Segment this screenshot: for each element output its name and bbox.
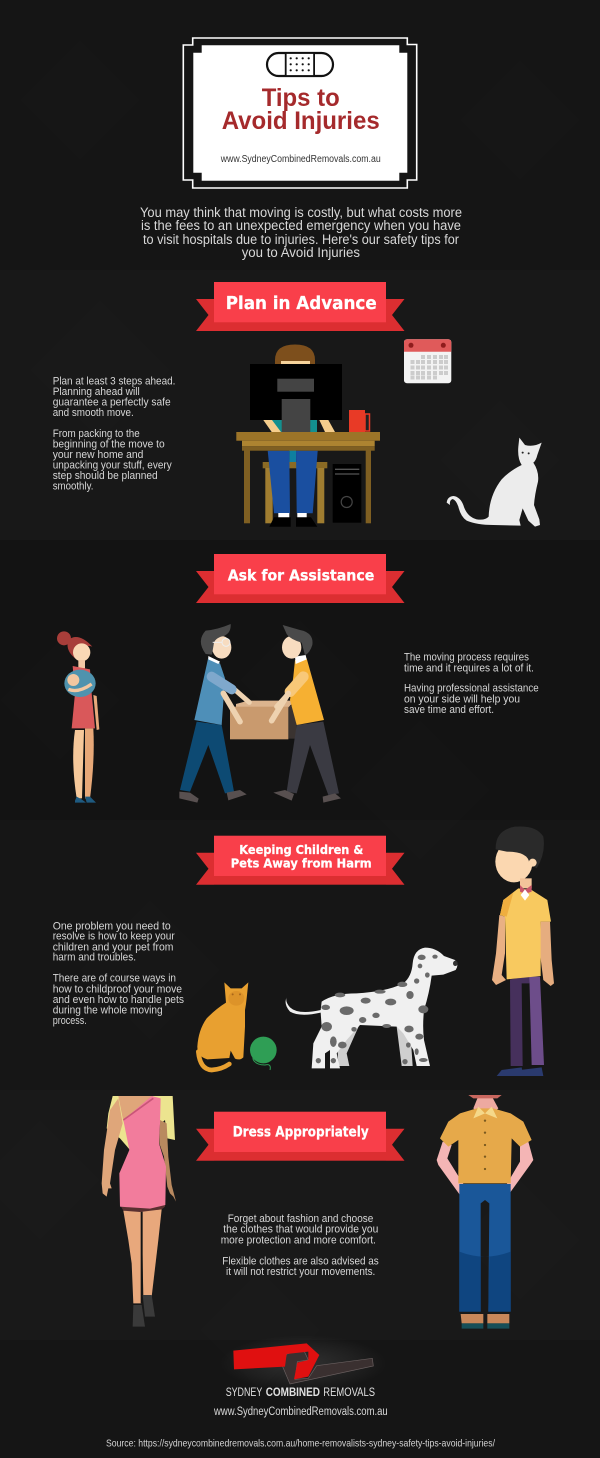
panel: children and pets text: and even how to handle pets [53, 994, 184, 1006]
illustration: man in yellow sweater [492, 826, 554, 1076]
intro text [140, 205, 462, 261]
panel: plan text: step should be planned [53, 470, 158, 482]
man in yellow shirt [272, 625, 341, 803]
company name: REMOVALS [323, 1387, 375, 1399]
ribbon: keeping children and pets away: Pets Away from Harm [231, 855, 372, 870]
panel: children and pets text: One problem you need to [53, 920, 171, 932]
panel: plan text: guarantee a perfectly safe [53, 397, 171, 409]
panel: plan text [53, 375, 175, 492]
illustration: woman in pink dress [102, 1096, 176, 1327]
intro text: to visit hospitals due to injuries. Here's our safety tips for [143, 232, 459, 248]
illustration: two men carrying box [179, 624, 341, 803]
title: Tips to [262, 84, 340, 112]
ribbon: dress appropriately [196, 1112, 404, 1161]
panel: plan text: your new home and [53, 449, 143, 461]
panel: assistance text [404, 652, 539, 716]
panel: dress text: the clothes that would provide you [223, 1224, 378, 1236]
panel: plan text: and smooth move. [53, 407, 134, 419]
panel: assistance text: The moving process requires [404, 652, 529, 664]
ribbon: ask for assistance: Ask for Assistance [228, 567, 374, 585]
company name [226, 1387, 375, 1399]
intro text: is the fees to an unexpected emergency when you have [141, 218, 461, 234]
panel: children and pets text: how to childproof your move [53, 983, 182, 995]
illustration: white cat [447, 438, 542, 527]
panel: plan text: beginning of the move to [53, 439, 165, 451]
panel: children and pets text: harm and troubles. [53, 952, 136, 964]
panel: children and pets text: resolve is how to keep your [53, 931, 175, 943]
illustration: woman with baby [57, 631, 99, 803]
panel: children and pets text: during the whole moving [53, 1004, 163, 1016]
panel: plan text: Plan at least 3 steps ahead. [53, 375, 175, 387]
illustration: person at desk [236, 344, 380, 527]
company name: COMBINED [266, 1387, 320, 1399]
ribbon: keeping children and pets away: Keeping Children & [239, 842, 363, 857]
illustration: orange cat with yarn [197, 982, 277, 1070]
panel: dress text [221, 1213, 379, 1278]
panel: dress text: Flexible clothes are also advised as [222, 1255, 379, 1267]
title card [183, 38, 417, 188]
panel: plan text: unpacking your stuff, every [53, 459, 172, 471]
panel: assistance text: save time and effort. [404, 704, 494, 716]
panel: dress text: it will not restrict your movements. [226, 1266, 375, 1278]
icon: calendar [404, 339, 451, 383]
footer url: www.SydneyCombinedRemovals.com.au [213, 1406, 388, 1418]
website url: www.SydneyCombinedRemovals.com.au [220, 154, 381, 165]
source line: Source: https://sydneycombinedremovals.com.au/home-removalists-sydney-safety-tips-avoid-injuries/ [106, 1438, 495, 1450]
panel: plan text: From packing to the [53, 428, 140, 440]
title: Avoid Injuries [222, 107, 380, 135]
ribbon: dress appropriately: Dress Appropriately [233, 1125, 369, 1141]
logo mark [220, 1335, 387, 1392]
intro text: You may think that moving is costly, but what costs more [140, 205, 462, 221]
title [222, 84, 380, 135]
panel: plan text: Planning ahead will [53, 386, 140, 398]
company name: SYDNEY [226, 1387, 263, 1399]
illustration: dalmatian [286, 948, 458, 1068]
panel: assistance text: on your side will help you [404, 694, 520, 706]
panel: dress text: more protection and more comfort. [221, 1234, 376, 1246]
ribbon: keeping children and pets away [196, 836, 404, 885]
panel: dress text: Forget about fashion and choose [228, 1213, 373, 1225]
illustration: man in shirt and jeans [437, 1095, 533, 1329]
icon: bandage [267, 53, 333, 76]
panel: assistance text: Having professional assistance [404, 683, 539, 695]
ribbon: plan in advance: Plan in Advance [226, 293, 377, 314]
ribbon: ask for assistance [196, 554, 404, 603]
panel: children and pets text: children and your pet from [53, 941, 173, 953]
panel: children and pets text [53, 920, 184, 1027]
intro text: you to Avoid Injuries [242, 245, 360, 261]
man with glasses [179, 624, 249, 803]
panel: plan text: smoothly. [53, 480, 93, 492]
ribbon: plan in advance [196, 282, 404, 331]
panel: assistance text: time and it requires a lot of it. [404, 662, 534, 674]
panel: children and pets text: There are of course ways in [53, 973, 176, 985]
panel: children and pets text: process. [53, 1015, 87, 1027]
